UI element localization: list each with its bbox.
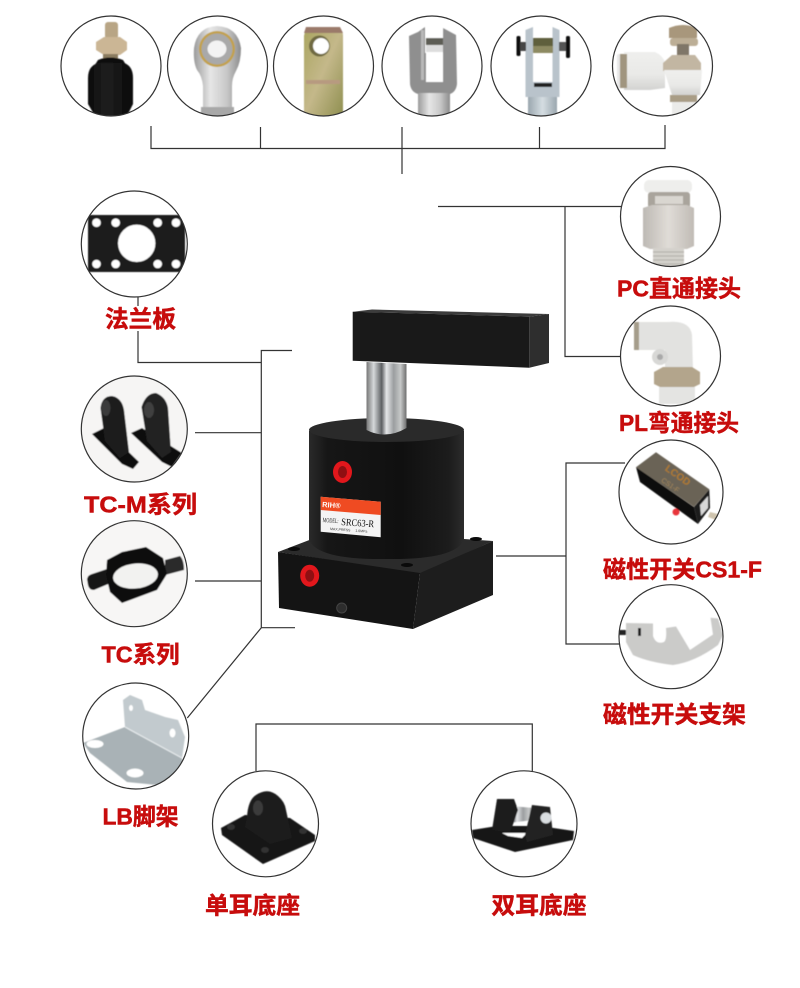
label: magnetic switch: 磁性开关CS1-F: [603, 556, 762, 582]
cylinder body: [309, 418, 464, 559]
icon: TC trunnion ring: [81, 520, 188, 627]
icon: magnetic switch bracket: [619, 585, 723, 689]
connector: top bracket: [151, 125, 665, 174]
connector: left mounts: [138, 297, 295, 718]
icon: PL elbow connector: [620, 306, 720, 406]
icon: magnetic switch CS1-F: CS1-F: [660, 477, 680, 494]
base block: [278, 537, 493, 629]
label: LB foot bracket: LB脚架: [102, 804, 178, 830]
label: PC straight connector: PC直通接头: [617, 276, 741, 302]
icon: magnetic switch CS1-F: [619, 440, 723, 544]
icon: TC-M pillow blocks: [81, 376, 188, 483]
rod: [366, 362, 406, 435]
label: magnetic switch bracket: 磁性开关支架: [603, 702, 746, 728]
icon: steel clevis: [382, 16, 482, 116]
model nameplate: [321, 497, 381, 537]
air port: cylinder: [333, 461, 352, 483]
label: TC-M series: TC-M系列: [84, 492, 197, 518]
main product: swing clamp cylinder SRC63-R: [278, 310, 549, 629]
label: TC series: TC系列: [102, 642, 180, 668]
icon: single eye rod end: [274, 16, 374, 116]
icon: double ear base: [471, 771, 577, 877]
label: PL elbow connector: PL弯通接头: [619, 409, 739, 436]
label: flange plate: 法兰板: [105, 306, 177, 332]
label: double ear base: 双耳底座: [492, 892, 586, 918]
icon: magnetic switch CS1-F: LCOD: [663, 463, 692, 489]
icon: LB foot bracket: [83, 683, 189, 789]
icon: black floating joint: [61, 16, 161, 116]
label: single ear base: 单耳底座: [205, 892, 300, 918]
model nameplate: MAX.PRESS 1.0MPa: [330, 527, 368, 534]
air port: base: [300, 565, 319, 587]
icon: PC straight connector: [620, 166, 720, 268]
small base hole: [337, 603, 347, 613]
icon: rod end bearing: [168, 16, 268, 117]
clamp arm: [353, 310, 549, 368]
icon: single ear base: [212, 771, 318, 877]
model nameplate: MODEL:: [322, 517, 339, 525]
model nameplate: SRC63-R: [341, 517, 375, 530]
connector: bottom bases: [256, 724, 532, 771]
icon: flange plate: [81, 191, 187, 297]
connector: right magnetic switches: [496, 463, 625, 644]
icon: clevis with clip: [491, 16, 591, 117]
icon: speed control valve: [612, 16, 712, 116]
connector: right pneumatic fittings: [438, 206, 621, 356]
model nameplate: RIH®: [322, 500, 341, 510]
